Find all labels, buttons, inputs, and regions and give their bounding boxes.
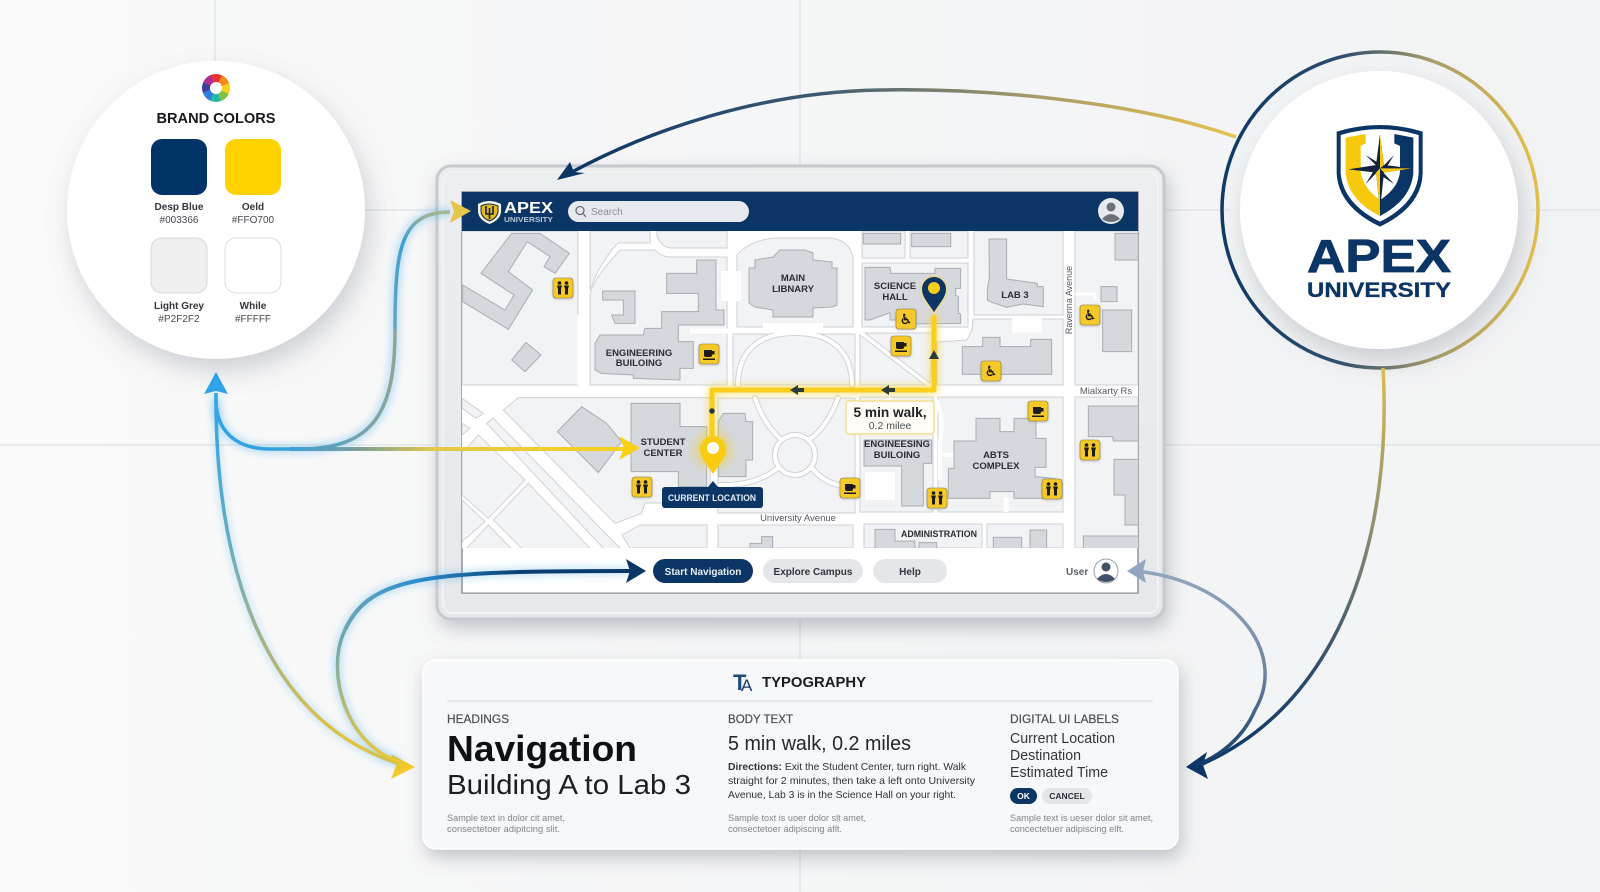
swatch: light grey: #P2F2F2: [158, 314, 200, 325]
building labels: ENGINEERING: [606, 348, 672, 359]
icon: user avatar: [1094, 559, 1118, 583]
column: headings: HEADINGS: [447, 712, 509, 726]
column: headings: Navigation: [447, 728, 637, 769]
pin: current location: [694, 431, 732, 474]
pin: destination: [921, 276, 947, 314]
header bar: UNIVERSITY: [504, 217, 553, 224]
column: body text: Sample toxt is uoer dolor slt amet,: [728, 813, 866, 824]
column: body text: Directions: Exit the Student Center, turn right. Walk: [728, 762, 967, 773]
building labels: BUILOING: [616, 358, 662, 369]
label: current location: [662, 481, 763, 508]
callout: walk time: [846, 396, 934, 434]
building labels: HALL: [882, 292, 908, 303]
building labels: COMPLEX: [973, 461, 1020, 472]
header bar: [462, 192, 1138, 231]
building labels: LIBNARY: [772, 284, 815, 295]
blocks: diagonal streets: [462, 398, 710, 550]
icon: typography TA: [733, 670, 753, 695]
building labels: ENGINEESING: [864, 439, 930, 450]
search box: Search: [591, 207, 623, 218]
building labels: ABTS: [983, 450, 1009, 461]
column: digital UI labels: CANCEL: [1049, 791, 1085, 801]
text: APEX: APEX: [1307, 230, 1451, 282]
column: digital UI labels: Current Location: [1010, 731, 1115, 747]
bottom navigation bar: [463, 548, 1137, 592]
swatch: gold: [225, 139, 281, 226]
swatch: deep blue: [151, 139, 207, 226]
arrow: typography to start navigation: [337, 559, 646, 762]
icon: typography TA: A: [741, 676, 753, 695]
heading: typography: TYPOGRAPHY: [762, 674, 866, 691]
building labels: STUDENT: [641, 437, 686, 448]
column: headings: Building A to Lab 3: [447, 769, 691, 800]
swatch: light grey: Light Grey: [154, 301, 204, 312]
column: body text: [728, 712, 976, 835]
icon: color wheel: [203, 75, 229, 101]
button: start navigation: [653, 559, 753, 583]
panel: logo: [1222, 52, 1538, 368]
icon: mini shield: [478, 201, 501, 224]
arrow: logo to tablet top: [557, 90, 1236, 180]
white road overlays: [578, 292, 1096, 512]
panel: tablet: [437, 166, 1164, 619]
route: [709, 315, 939, 437]
quad ring roads: [720, 333, 852, 487]
column: digital UI labels: Sample text is ueser dolor sit amet,: [1010, 813, 1153, 824]
swatch: gold: Oeld: [242, 202, 264, 213]
column: body text: 5 min walk, 0.2 miles: [728, 733, 911, 755]
button: help: Help: [899, 567, 921, 578]
column: digital UI labels: OK: [1017, 791, 1031, 801]
column: body text: consectetoer adipiscing aflt.: [728, 824, 842, 835]
building labels: SCIENCE: [874, 281, 916, 292]
arrow: brand colors to typography: [204, 372, 415, 779]
icon: typography TA: T: [733, 670, 747, 695]
icons: amenities: ♿: [900, 312, 912, 328]
column: digital UI labels: Estimated Time: [1010, 765, 1108, 781]
icons: amenities: [553, 278, 1100, 508]
arrow: brand colors to header: [216, 200, 471, 449]
buildings: [463, 233, 724, 380]
arrow: brand colors to student center: [290, 436, 640, 460]
column: headings: [447, 712, 691, 835]
building labels: MAIN: [781, 273, 805, 284]
text: UNIVERSITY: UNIVERSITY: [1307, 279, 1451, 302]
swatch: deep blue: #003366: [160, 215, 199, 226]
icon: profile avatar: [1098, 198, 1124, 224]
building labels: Mialxarty Rs: [1080, 386, 1132, 397]
swatch: light grey: [151, 238, 207, 325]
column: headings: consectetoer adipitcing slit.: [447, 824, 560, 835]
column: digital UI labels: DIGITAL UI LABELS: [1010, 712, 1119, 726]
icon: shield emblem: [1337, 125, 1423, 227]
button: start navigation: Start Navigation: [665, 567, 741, 578]
arrow: logo to typography: [1186, 368, 1384, 779]
arrow: user to typography: [1127, 559, 1265, 766]
column: digital UI labels: concectetuer adipiscing elft.: [1010, 824, 1124, 835]
column: headings: Sample text in dolor cit amet,: [447, 813, 565, 824]
search box: [568, 201, 749, 222]
callout: walk time: 0.2 milee: [869, 420, 911, 432]
campus map: [462, 231, 1140, 550]
callout: walk time: 5 min walk,: [854, 404, 926, 420]
text: APEX wordmark: APEX: [504, 200, 553, 217]
building labels: [606, 266, 1132, 540]
column: digital UI labels: [1010, 712, 1153, 835]
label: current location: CURRENT LOCATION: [668, 493, 756, 504]
button: help: [873, 559, 947, 583]
column: body text: straight for 2 minutes, then take a left onto University: [728, 776, 976, 787]
icons: amenities: ♿: [1084, 308, 1096, 324]
column: body text: BODY TEXT: [728, 712, 794, 726]
building labels: CENTER: [643, 448, 683, 459]
building labels: BUILOING: [874, 450, 920, 461]
building: main library: [749, 250, 837, 317]
button: explore campus: Explore Campus: [774, 567, 853, 578]
column: body text: Avenue, Lab 3 is in the Science Hall on your right.: [728, 790, 956, 801]
heading: brand colors: BRAND COLORS: [156, 110, 276, 127]
panel: typography: [423, 660, 1178, 849]
building labels: ADMINISTRATION: [901, 529, 977, 540]
white plot: [865, 472, 895, 500]
swatch: white: [225, 238, 281, 325]
swatch: white: While: [240, 301, 267, 312]
panel: brand colors: [67, 61, 365, 359]
building labels: LAB 3: [1001, 290, 1029, 301]
swatch: deep blue: Desp Blue: [155, 202, 204, 213]
column: digital UI labels: Destination: [1010, 748, 1081, 764]
text: user: User: [1066, 567, 1088, 578]
icons: amenities: ♿: [985, 364, 997, 380]
swatch: white: #FFFFF: [235, 314, 271, 325]
building labels: Ravenna Avenue: [1064, 266, 1074, 334]
button: explore campus: [763, 559, 863, 583]
swatch: gold: #FFO700: [232, 215, 275, 226]
building labels: University Avenue: [760, 513, 836, 524]
